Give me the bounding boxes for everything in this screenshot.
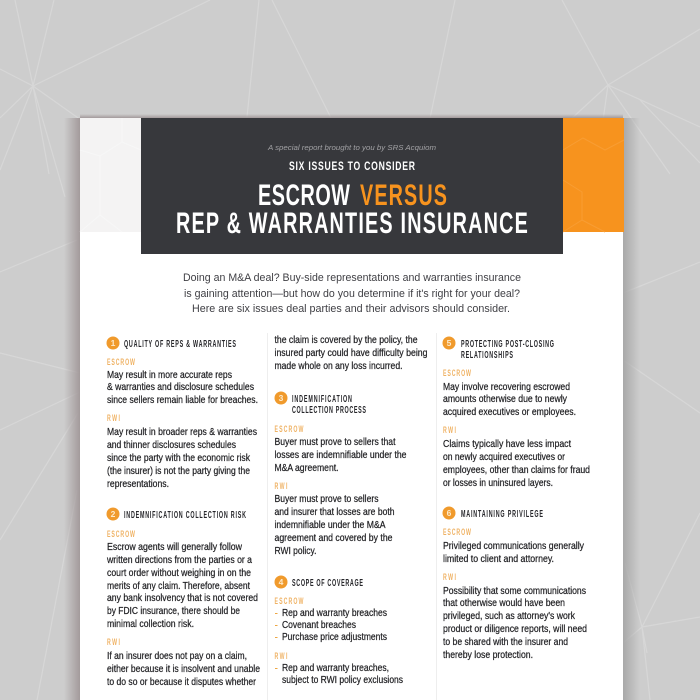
title line 2: REP & WARRANTIES INSURANCE [176,207,528,240]
rwi text 5 [443,424,590,489]
rwi text 6: thereby lose protection. [443,650,533,661]
escrow text 5: acquired executives or employees. [443,407,576,418]
escrow text 5: amounts otherwise due to newly [443,394,567,405]
escrow text 6: ESCROW [443,526,472,537]
rwi text 2: made whole on any loss incurred. [274,361,402,372]
rwi text 5: on newly acquired executives or [443,452,566,463]
escrow text 1 [107,356,258,406]
rwi text 3: and insurer that losses are both [274,507,394,518]
issue 3: indemnification collection process [274,392,406,557]
title banner [141,118,563,254]
rwi text 2: If an insurer does not pay on a claim, [107,651,247,662]
number badge 2: 2 [111,509,116,519]
heading 2: INDEMNIFICATION COLLECTION RISK [124,509,246,520]
number badge 4: 4 [279,577,284,587]
rwi text 1: since the party with the economic risk [107,453,250,464]
rwi list: RWI [274,650,287,661]
rwi text 2: the claim is covered by the policy, the [274,335,418,346]
escrow list [274,595,387,643]
escrow text 2 [106,528,258,630]
rwi text 1: (the insurer) is not the party giving the [107,466,250,477]
heading 3: INDEMNIFICATION [292,393,352,404]
heading 1: QUALITY OF REPS & WARRANTIES [124,338,236,349]
rwi text 3: RWI policy. [274,546,316,557]
escrow list: Purchase price adjustments [282,632,387,643]
number badge 3: 3 [279,393,284,403]
escrow text 2: merits of any claim. Therefore, absent [107,581,250,592]
number badge 1: 1 [111,338,116,348]
escrow text 2: written directions from the parties or a [106,555,253,566]
number badge 5 [442,336,456,350]
rwi text 6: product or diligence reports, will need [443,624,587,635]
intro paragraph [183,272,521,315]
escrow text 1: since sellers remain liable for breaches. [107,395,258,406]
rwi text 2: either because it is insolvent and unable [107,664,260,675]
rwi list [274,650,403,686]
number badge 1 [106,336,120,350]
intro paragraph: Doing an M&A deal? Buy-side representations and warranties insurance [183,272,521,284]
escrow text 1: ESCROW [107,356,136,367]
rwi text 2: to do so or because it disputes whether [107,677,257,688]
escrow text 2: ESCROW [107,528,136,539]
heading 3: COLLECTION PROCESS [292,404,366,415]
title line 1: VERSUS [360,179,447,212]
rwi text 1: representations. [107,479,169,490]
heading 3 [292,393,366,415]
heading 5 [461,338,554,360]
rwi text 5: employees, other than claims for fraud [443,465,590,476]
rwi text 1: RWI [107,412,120,423]
rwi text 3: agreement and covered by the [274,533,392,544]
escrow text 6: Privileged communications generally [443,541,584,552]
rwi text 2: RWI [107,636,120,647]
rwi text 3: indemnifiable under the M&A [274,520,386,531]
rwi text 6: that otherwise would have been [443,598,565,609]
issue 1: quality of reps and warranties [106,336,258,490]
heading 5: RELATIONSHIPS [461,349,513,360]
rwi text 1: May result in broader reps & warranties [107,427,257,438]
rwi text 5: Claims typically have less impact [443,439,571,450]
rwi text 2 [107,335,428,688]
report attribution: A special report brought to you by SRS Acquiom [267,143,436,152]
escrow text 1: May result in more accurate reps [107,370,232,381]
rwi text 6: RWI [443,571,456,582]
issue 5: protecting post-closing relationships [442,336,590,489]
escrow list: Covenant breaches [282,620,356,631]
heading 6: MAINTAINING PRIVILEGE [461,508,543,519]
escrow list: Rep and warranty breaches [282,608,387,619]
title line 1 [258,179,447,212]
issue 6: maintaining privilege [442,506,587,661]
rwi text 3: Buyer must prove to sellers [274,494,379,505]
title line 1: ESCROW [258,179,350,212]
escrow text 3: ESCROW [274,423,304,434]
escrow list: ESCROW [274,595,304,606]
rwi text 5: RWI [443,424,456,435]
number badge 6 [442,506,456,520]
rwi text 6: to be shared with the insurer and [443,637,568,648]
rwi list: subject to RWI policy exclusions [282,675,403,686]
rwi text 5: or losses in uninsured layers. [443,478,553,489]
escrow text 6 [443,526,584,565]
intro paragraph: Here are six issues deal parties and their advisors should consider. [192,303,510,315]
rwi text 6: Possibility that some communications [443,586,586,597]
escrow text 3: M&A agreement. [274,463,338,474]
rwi text 3: RWI [274,480,287,491]
heading 5: PROTECTING POST-CLOSING [461,338,554,349]
number badge 2 [106,508,120,520]
escrow text 5: May involve recovering escrowed [443,382,570,393]
number badge 6: 6 [447,508,452,518]
escrow text 2: minimal collection risk. [107,619,194,630]
escrow text 3: Buyer must prove to sellers that [274,437,396,448]
subtitle: SIX ISSUES TO CONSIDER [289,161,415,173]
report page [80,118,623,700]
number badge 5: 5 [447,338,452,348]
escrow text 5: ESCROW [443,367,472,378]
number badge 3 [274,392,288,404]
rwi text 1: and thinner disclosures schedules [107,440,236,451]
rwi text 6 [443,571,587,661]
escrow text 3: losses are indemnifiable under the [274,450,406,461]
escrow text 2: Escrow agents will generally follow [107,542,243,553]
issue 4: scope of coverage [274,576,403,686]
escrow text 6: limited to client and attorney. [443,554,554,565]
escrow text 5 [443,367,576,418]
escrow text 2: any bank insolvency that is not covered [107,593,258,604]
issue 2: indemnification collection risk [106,335,428,688]
rwi text 1 [107,412,257,490]
escrow text 1: & warranties and disclosure schedules [107,382,254,393]
rwi text 6: privileged, such as attorney's work [443,611,575,622]
left grey header block [80,118,141,232]
escrow text 2: court order without weighing in on the [107,568,251,579]
escrow text 2: by FDIC insurance, there should be [107,606,240,617]
rwi text 2: insured party could have difficulty being [274,348,428,359]
right orange header block [563,118,624,232]
escrow text 3 [274,423,406,474]
intro paragraph: is gaining attention—but how do you determine if it's right for your deal? [184,288,520,300]
rwi text 3 [274,480,394,557]
page shadow [64,114,640,700]
rwi list: Rep and warranty breaches, [282,663,389,674]
heading 4: SCOPE OF COVERAGE [292,577,363,588]
